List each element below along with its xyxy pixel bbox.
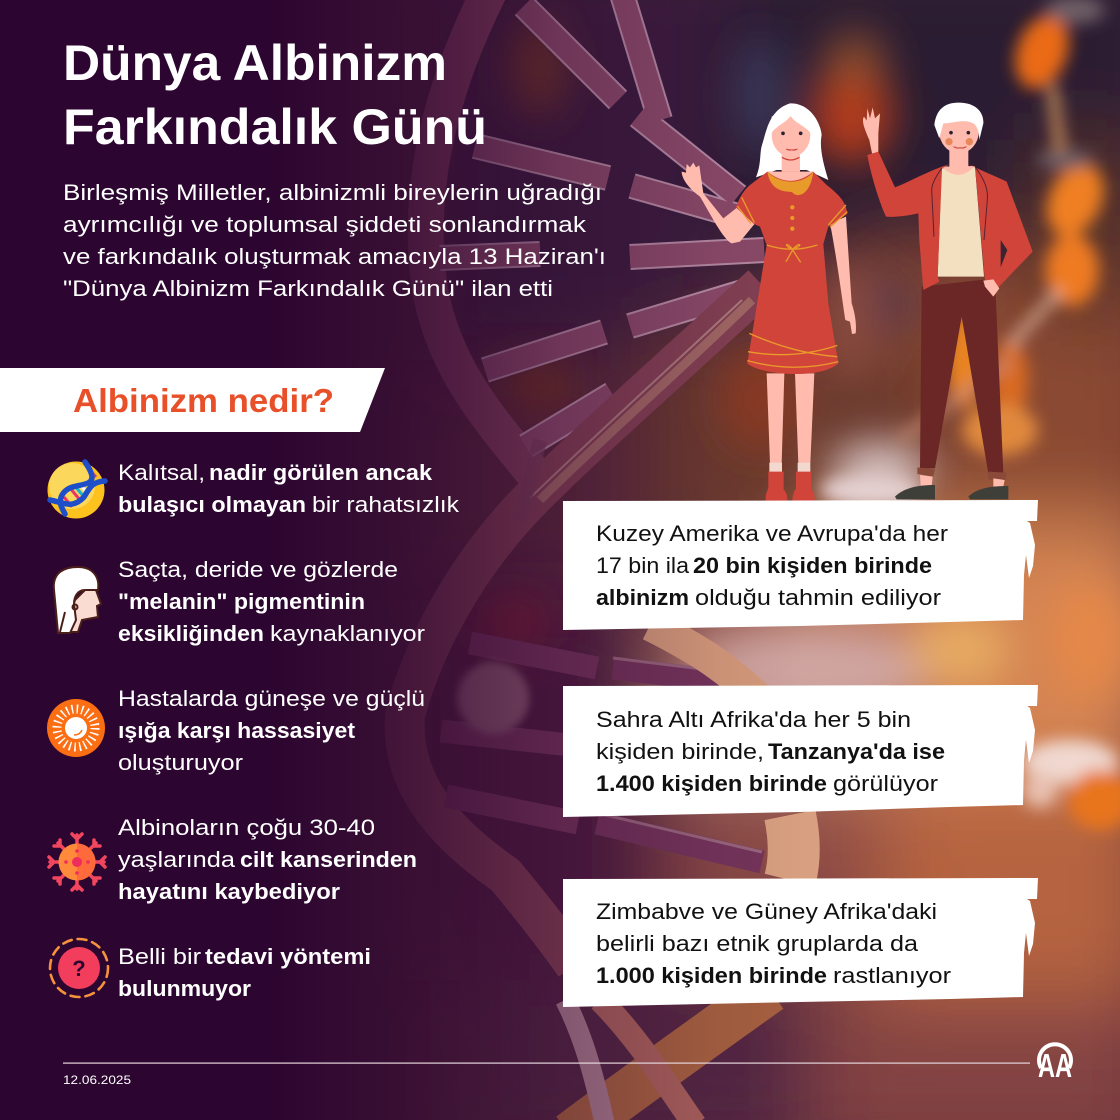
intro paragraph: Birleşmiş Milletler, albinizmli bireylerin uğradığı bbox=[63, 180, 602, 205]
card 2: 1.400 kişiden birinde bbox=[596, 771, 827, 796]
list item 3: ışığa karşı hassasiyet bbox=[118, 718, 356, 743]
list item 2: Saçta, deride ve gözlerde bbox=[118, 557, 398, 582]
card 1: albinizm bbox=[596, 585, 689, 610]
icon: question mark bbox=[50, 939, 108, 997]
card 3 bbox=[563, 878, 1038, 1007]
list item 1: bulaşıcı olmayan bbox=[118, 492, 306, 517]
card 3: rastlanıyor bbox=[833, 963, 951, 988]
intro paragraph bbox=[63, 180, 606, 301]
illustration: albino couple bbox=[682, 103, 1033, 503]
list item 4: cilt kanserinden bbox=[240, 847, 417, 872]
card 2: kişiden birinde, bbox=[596, 739, 764, 764]
title bbox=[63, 35, 487, 155]
man bbox=[863, 103, 1033, 499]
title: Dünya Albinizm bbox=[63, 35, 447, 91]
icon: question mark: ? bbox=[72, 956, 86, 981]
card 2: Tanzanya'da ise bbox=[768, 739, 945, 764]
list item 4: Albinoların çoğu 30-40 bbox=[118, 815, 375, 840]
logo: AA bbox=[1038, 1044, 1072, 1084]
date: 12.06.2025 bbox=[63, 1073, 131, 1087]
footer rule bbox=[63, 1062, 1030, 1064]
list item 4: yaşlarında bbox=[118, 847, 236, 872]
card 1: 17 bin ila bbox=[596, 553, 690, 578]
card 1: Kuzey Amerika ve Avrupa'da her bbox=[596, 521, 948, 546]
card 2 bbox=[563, 685, 1038, 817]
list item 3: Hastalarda güneşe ve güçlü bbox=[118, 686, 425, 711]
card 1: 20 bin kişiden birinde bbox=[693, 553, 932, 578]
DNA back strand, upper bbox=[426, 0, 535, 475]
list item 5: tedavi yöntemi bbox=[205, 944, 371, 969]
DNA peach strands bbox=[520, 440, 794, 1120]
intro paragraph: ayrımcılığı ve toplumsal şiddeti sonlandırmak bbox=[63, 212, 587, 237]
banner: Albinizm nedir?: Albinizm nedir? bbox=[73, 382, 334, 419]
intro paragraph: "Dünya Albinizm Farkındalık Günü" ilan etti bbox=[63, 276, 553, 301]
intro paragraph: ve farkındalık oluşturmak amacıyla 13 Haziran'ı bbox=[63, 244, 606, 269]
list item 2: kaynaklanıyor bbox=[270, 621, 425, 646]
list item 2 bbox=[54, 557, 425, 646]
icon: head with white hair bbox=[54, 567, 101, 633]
card 2: Sahra Altı Afrika'da her 5 bin bbox=[596, 707, 911, 732]
card 1: olduğu tahmin ediliyor bbox=[695, 585, 941, 610]
DNA front strand bbox=[405, 285, 762, 965]
DNA helix bbox=[405, 0, 794, 1120]
title: Farkındalık Günü bbox=[63, 99, 487, 155]
icon: virus bbox=[49, 834, 105, 890]
list item 1: Kalıtsal, bbox=[118, 460, 205, 485]
card 2: görülüyor bbox=[833, 771, 938, 796]
icon: DNA bbox=[48, 462, 105, 518]
list item 1: bir rahatsızlık bbox=[312, 492, 460, 517]
list item 2: eksikliğinden bbox=[118, 621, 264, 646]
list item 2: "melanin" pigmentinin bbox=[118, 589, 365, 614]
list item 4 bbox=[49, 815, 417, 904]
woman bbox=[682, 103, 856, 503]
logo: AA: AA bbox=[1038, 1047, 1072, 1084]
DNA rungs, upper bbox=[440, 0, 764, 446]
card 3: belirli bazı etnik gruplarda da bbox=[596, 931, 919, 956]
DNA rungs, lower bbox=[441, 643, 762, 862]
list item 3 bbox=[47, 686, 425, 775]
card 1 bbox=[563, 500, 1038, 630]
list item 4: hayatını kaybediyor bbox=[118, 879, 340, 904]
list item 1: nadir görülen ancak bbox=[209, 460, 433, 485]
banner: Albinizm nedir? bbox=[0, 368, 385, 432]
list item 5: Belli bir bbox=[118, 944, 201, 969]
card 3: Zimbabve ve Güney Afrika'daki bbox=[596, 899, 937, 924]
list item 3: oluşturuyor bbox=[118, 750, 243, 775]
list item 5 bbox=[50, 939, 371, 1001]
list item 5: bulunmuyor bbox=[118, 976, 251, 1001]
card 3: 1.000 kişiden birinde bbox=[596, 963, 827, 988]
list item 1 bbox=[48, 460, 460, 518]
icon: sun bbox=[47, 699, 105, 757]
